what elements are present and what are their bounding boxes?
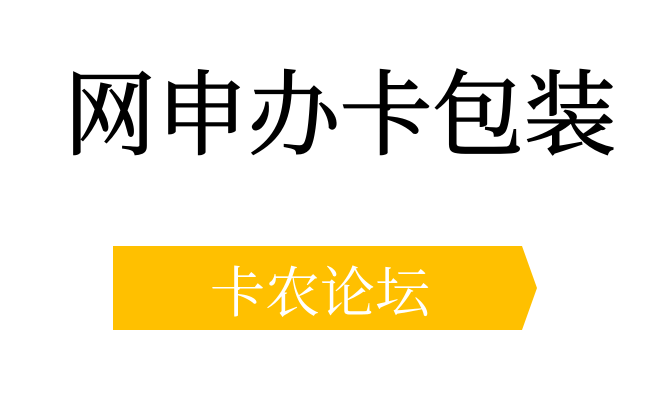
arrow shape	[113, 246, 537, 330]
title: 网申办卡包装	[64, 65, 616, 167]
banner: yellow arrow label	[113, 246, 537, 330]
banner text: 卡农论坛	[210, 263, 430, 324]
